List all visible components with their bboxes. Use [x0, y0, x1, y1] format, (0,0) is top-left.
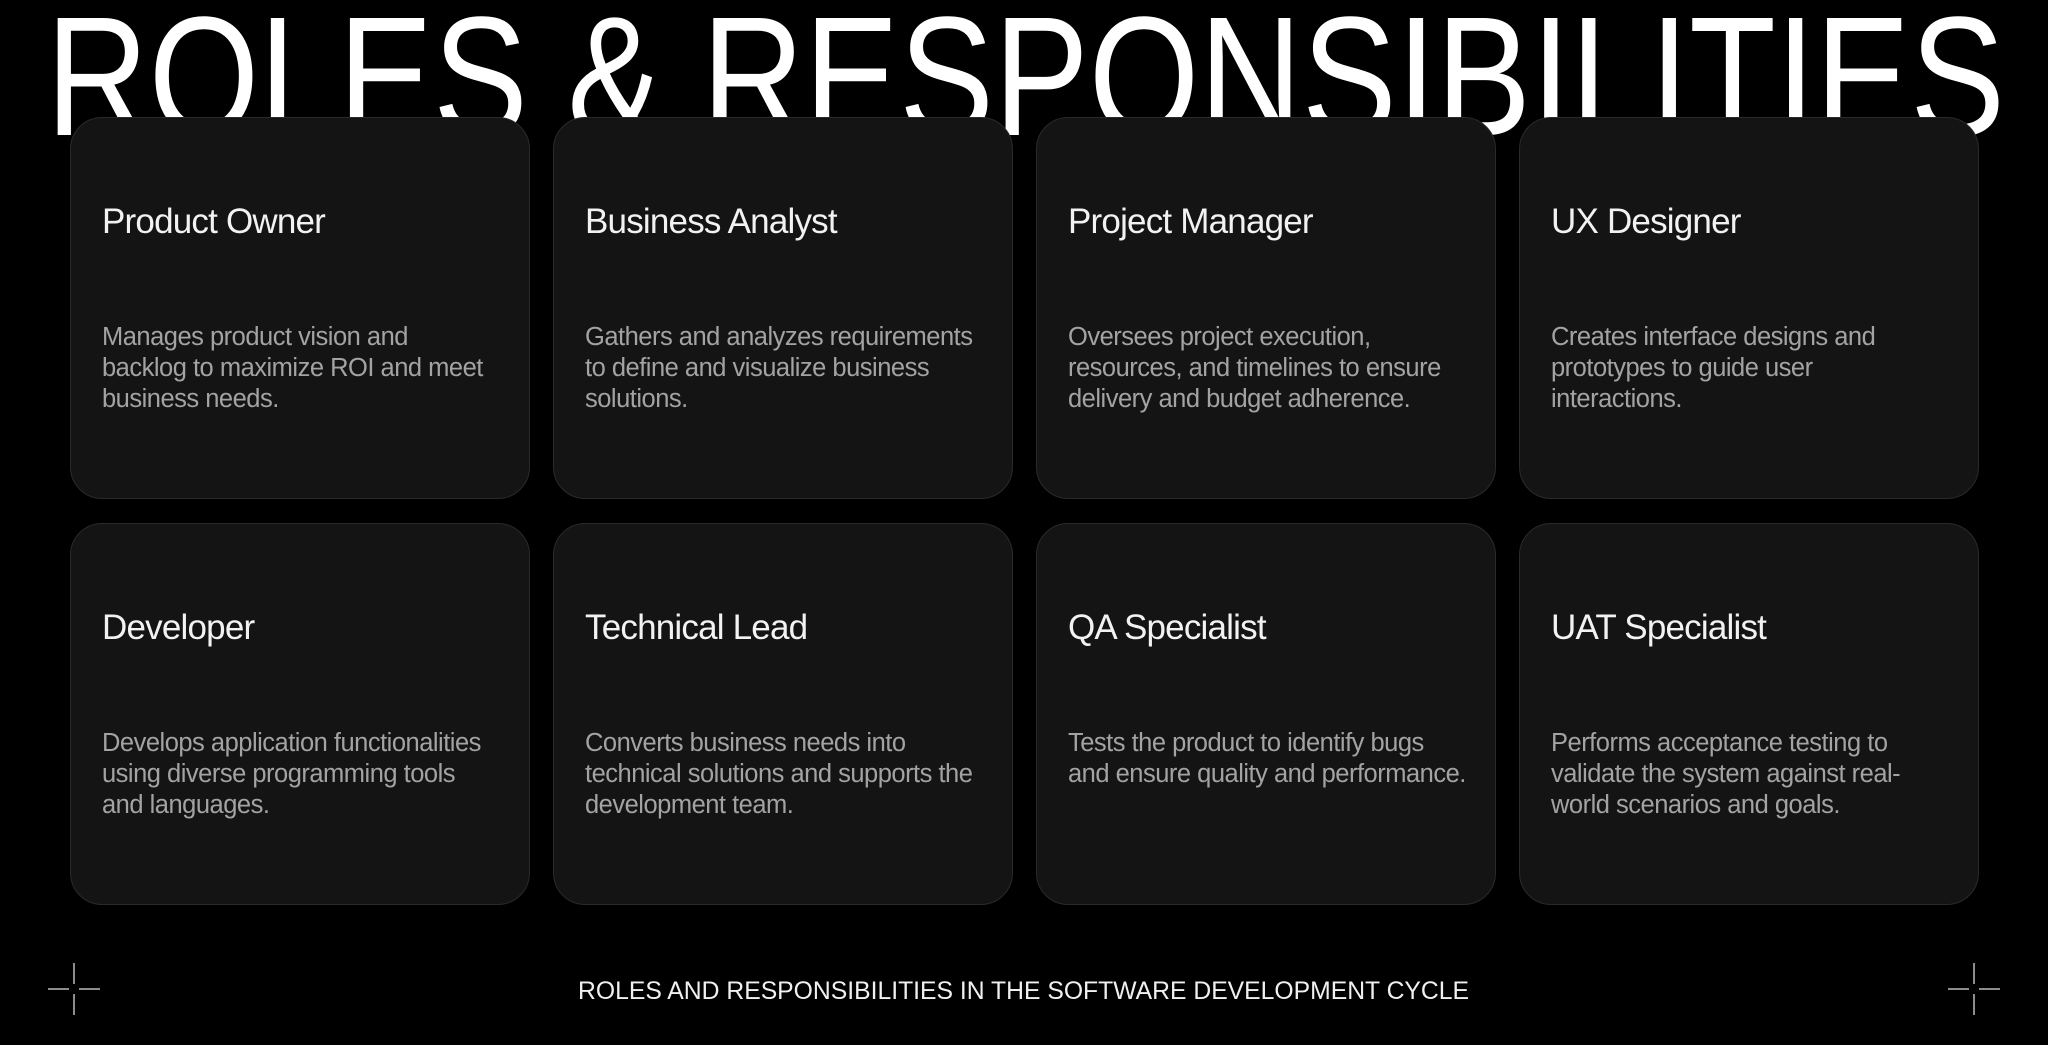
card: Project Manager: Oversees project execution, resources, and timelines to ensure delivery and budget adherence.	[1068, 323, 1441, 413]
card: Developer: Develops application functionalities using diverse programming tools and languages.	[102, 729, 481, 819]
card: Business Analyst: Gathers and analyzes requirements to define and visualize business solutions.	[585, 323, 972, 413]
card: Technical Lead	[553, 523, 1013, 905]
footer caption: ROLES AND RESPONSIBILITIES IN THE SOFTWARE DEVELOPMENT CYCLE	[578, 977, 1469, 1005]
card: Project Manager	[1036, 117, 1496, 499]
icon: crosshair right	[1948, 963, 2000, 1015]
card: Product Owner: Manages product vision and backlog to maximize ROI and meet business needs.	[102, 323, 483, 413]
card: Business Analyst: Business Analyst	[585, 202, 837, 241]
card: Technical Lead: Technical Lead	[585, 608, 807, 647]
card: Developer: Developer	[102, 608, 254, 647]
card: Business Analyst	[553, 117, 1013, 499]
card: UAT Specialist	[1519, 523, 1979, 905]
card: UAT Specialist: Performs acceptance testing to validate the system against real-world scenarios and goals.	[1551, 729, 1900, 819]
card: Developer	[70, 523, 530, 905]
card: UX Designer: Creates interface designs and prototypes to guide user interactions.	[1551, 323, 1875, 413]
card: QA Specialist: Tests the product to identify bugs	[1068, 729, 1424, 757]
card: Project Manager: Project Manager	[1068, 202, 1313, 241]
card: QA Specialist: and ensure quality and performance.	[1068, 760, 1466, 788]
card: Product Owner: Product Owner	[102, 202, 325, 241]
card: QA Specialist: QA Specialist	[1068, 608, 1266, 647]
card: Technical Lead: Converts business needs into technical solutions and supports the development team.	[585, 729, 972, 819]
icon: crosshair left	[48, 963, 100, 1015]
card: Product Owner	[70, 117, 530, 499]
card: UX Designer	[1519, 117, 1979, 499]
card: QA Specialist	[1036, 523, 1496, 905]
card: UAT Specialist: UAT Specialist	[1551, 608, 1766, 647]
card: UX Designer: UX Designer	[1551, 202, 1741, 241]
